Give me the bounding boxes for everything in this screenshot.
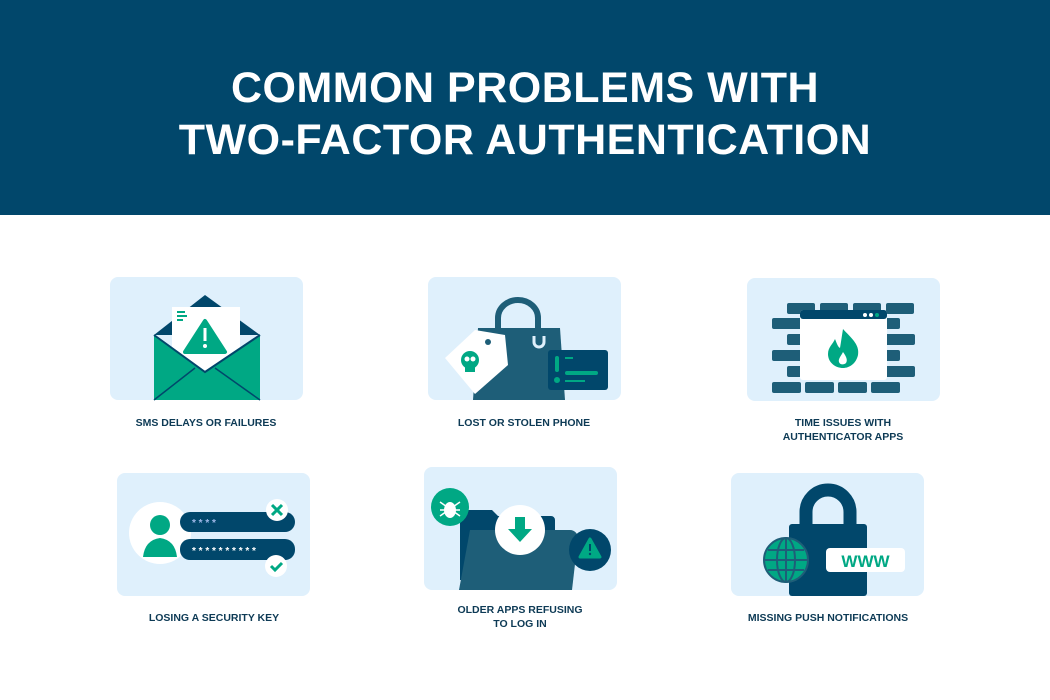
icon: user with password fields: * * * * * * * * * * <box>192 546 256 557</box>
label: older apps <box>457 604 583 630</box>
label: push notifications: MISSING PUSH NOTIFICATIONS <box>748 612 908 624</box>
icon: lock with globe and www: WWW <box>841 552 891 571</box>
panel: security key <box>117 473 310 596</box>
label: time issues: TIME ISSUES WITH <box>795 417 891 429</box>
label: time issues: AUTHENTICATOR APPS <box>783 431 903 443</box>
label: older apps: OLDER APPS REFUSING <box>457 604 583 616</box>
label: older apps: TO LOG IN <box>493 618 547 630</box>
panel: time issues <box>747 278 940 401</box>
title <box>179 64 871 164</box>
icon: bag with tag and card <box>445 300 608 400</box>
icon: envelope <box>154 295 260 400</box>
icon: firewall browser <box>772 303 915 393</box>
header banner <box>0 0 1050 215</box>
label: lost phone: LOST OR STOLEN PHONE <box>458 417 590 429</box>
panel: lost phone <box>428 277 621 400</box>
label: security key: LOSING A SECURITY KEY <box>149 612 279 624</box>
label: time issues <box>783 417 903 443</box>
title: TWO-FACTOR AUTHENTICATION <box>179 116 871 164</box>
icon: folder with download <box>431 488 611 590</box>
panel: older apps <box>424 467 617 590</box>
icon: lock with globe and www <box>764 490 905 596</box>
label: sms: SMS DELAYS OR FAILURES <box>136 417 276 429</box>
panel: sms <box>110 277 303 400</box>
icon: user with password fields <box>129 499 295 577</box>
icon: user with password fields: * * * * <box>192 518 216 529</box>
title: COMMON PROBLEMS WITH <box>231 64 819 112</box>
panel: push notifications <box>731 473 924 596</box>
